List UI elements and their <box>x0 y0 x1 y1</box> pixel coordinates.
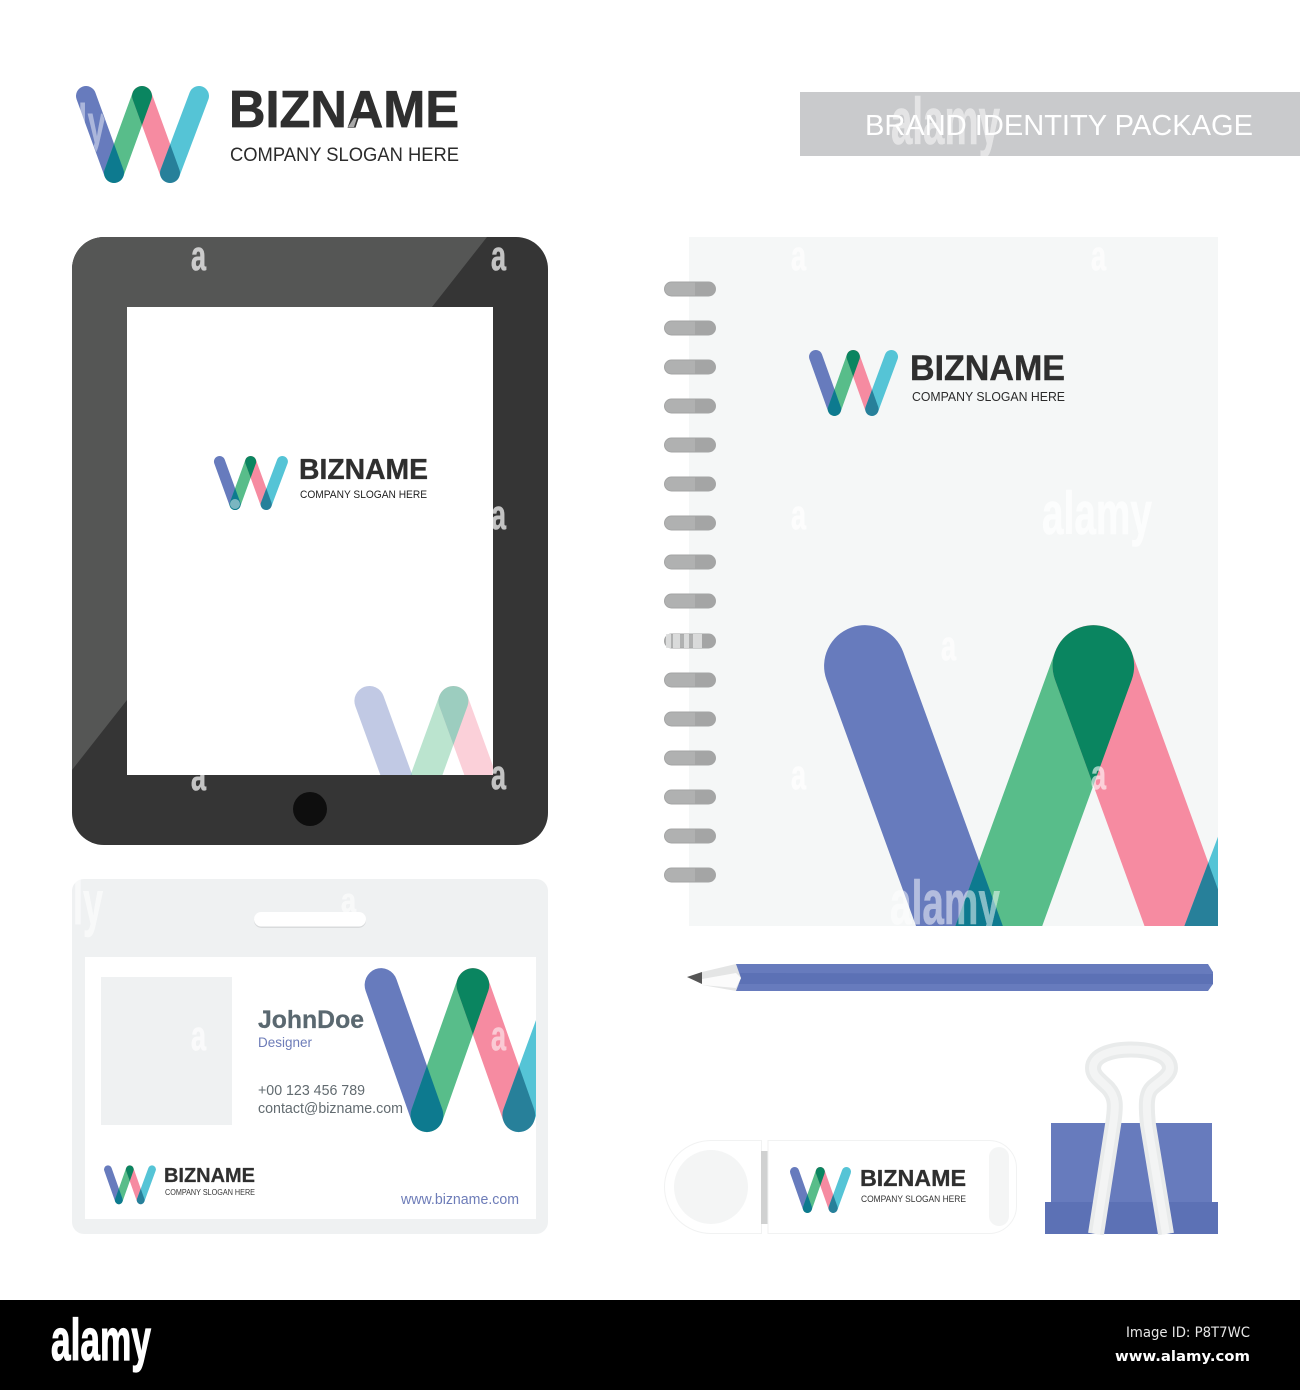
binder clip <box>1045 1050 1218 1234</box>
ID card holder: a <box>341 882 357 920</box>
ID card holder <box>72 869 566 1234</box>
notebook: alamy <box>1042 480 1152 547</box>
notebook: a <box>791 751 806 798</box>
tablet: a <box>491 491 506 538</box>
card big W <box>381 985 566 1115</box>
banner: brand identity package: BRAND IDENTITY PACKAGE <box>865 110 1253 142</box>
screen logo <box>220 454 428 509</box>
usb logo <box>795 1165 966 1208</box>
notebook: a <box>1091 751 1106 798</box>
footer band <box>0 1300 1300 1390</box>
clip base <box>1045 1202 1218 1234</box>
ID card holder: a <box>491 1012 506 1059</box>
alamy wordmark: alamy <box>51 1308 151 1373</box>
clip back <box>1051 1123 1212 1203</box>
photo placeholder <box>101 977 232 1125</box>
tablet: a <box>491 232 506 279</box>
header logo: ly <box>78 92 106 155</box>
notebook: a <box>791 491 806 538</box>
notebook: a <box>791 232 806 279</box>
tablet screen <box>127 307 493 775</box>
tablet body <box>72 237 548 845</box>
email: contact@bizname.com <box>258 1101 403 1117</box>
usb cap <box>664 1140 762 1234</box>
ID card holder: a <box>191 1012 206 1059</box>
banner: brand identity package <box>800 84 1300 158</box>
tablet: a <box>191 232 206 279</box>
tablet <box>72 232 548 845</box>
slot <box>254 913 366 928</box>
screen faded W <box>354 686 493 775</box>
notebook <box>664 237 1218 926</box>
alamy url: www.alamy.com <box>1115 1349 1250 1365</box>
name: JohnDoe <box>258 1006 364 1034</box>
tablet: a <box>191 752 206 799</box>
logo name: BIZNAME <box>229 81 459 139</box>
clip wire <box>1093 1050 1170 1234</box>
role: Designer <box>258 1034 312 1050</box>
notebook logo <box>816 349 1065 409</box>
card logo: COMPANY SLOGAN HERE <box>165 1188 255 1197</box>
image id: Image ID: P8T7WC <box>1126 1325 1250 1341</box>
notebook: alamy <box>890 869 1000 938</box>
card logo: BIZNAME <box>164 1165 255 1187</box>
holder <box>72 879 548 1234</box>
spiral rings <box>664 282 716 882</box>
card <box>85 957 536 1219</box>
card logo <box>108 1165 255 1200</box>
notebook page <box>689 237 1218 926</box>
usb logo: BIZNAME <box>860 1165 966 1191</box>
website: www.bizname.com <box>400 1192 519 1208</box>
tablet glare <box>72 237 487 770</box>
header logo <box>78 81 459 173</box>
usb connector <box>761 1151 768 1224</box>
big W <box>824 625 1218 926</box>
screen logo: BIZNAME <box>299 454 428 486</box>
banner: brand identity package: alamy <box>891 84 1000 158</box>
home button <box>293 792 327 826</box>
USB drive <box>664 1140 1016 1234</box>
notebook logo: COMPANY SLOGAN HERE <box>912 389 1065 404</box>
ID card holder: ly <box>73 869 103 938</box>
icon: W logo mark <box>86 96 199 173</box>
logo slogan: COMPANY SLOGAN HERE <box>230 144 459 166</box>
pencil <box>687 964 1213 991</box>
screen logo: COMPANY SLOGAN HERE <box>300 489 427 501</box>
notebook logo: BIZNAME <box>910 349 1065 388</box>
usb body <box>768 1140 1016 1234</box>
usb logo: COMPANY SLOGAN HERE <box>861 1194 966 1204</box>
notebook: a <box>941 622 956 669</box>
phone: +00 123 456 789 <box>258 1083 365 1099</box>
notebook: a <box>1091 232 1106 279</box>
tablet: a <box>491 751 506 798</box>
